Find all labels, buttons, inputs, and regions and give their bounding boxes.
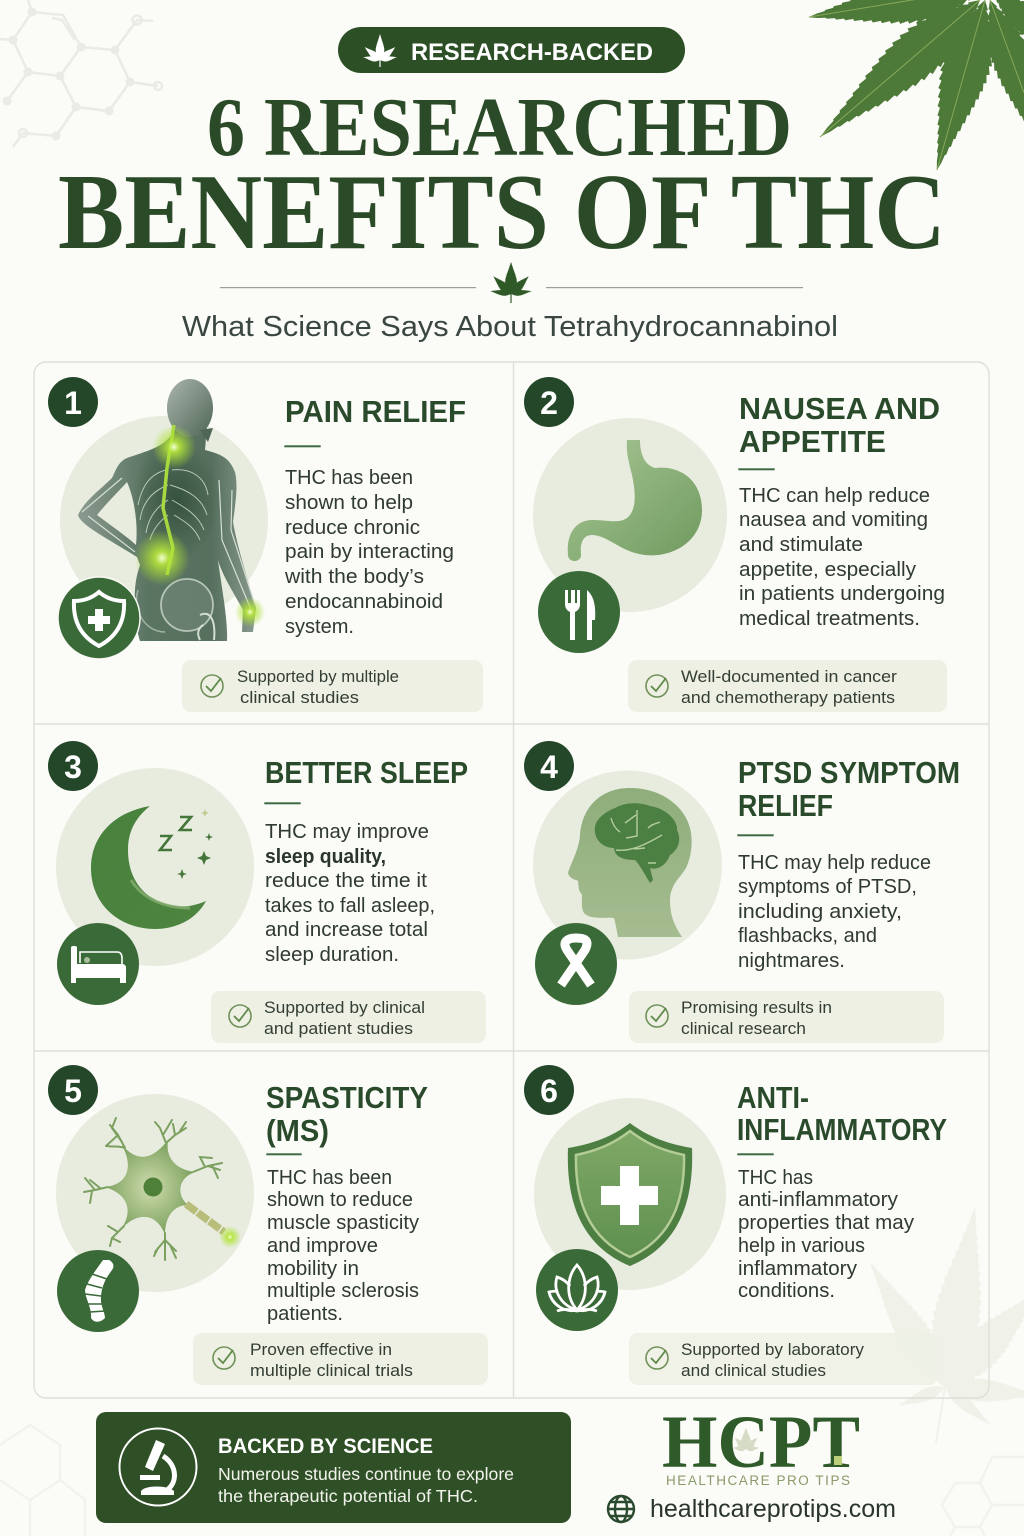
logo: HCPT: HCPT xyxy=(662,1401,860,1484)
body text: in patients undergoing xyxy=(739,583,945,605)
illustration: crescent moon and stars xyxy=(56,768,254,966)
badge: research-backed: RESEARCH-BACKED xyxy=(411,39,653,66)
evidence callout xyxy=(629,991,944,1043)
body text: THC has been xyxy=(267,1167,392,1189)
body text: THC has xyxy=(738,1167,813,1189)
body text: with the body’s xyxy=(284,566,424,588)
badge: research-backed xyxy=(338,27,685,73)
body text: flashbacks, and xyxy=(738,925,877,947)
evidence callout: clinical studies xyxy=(240,689,359,707)
website link with globe: healthcareprotips.com xyxy=(650,1495,896,1523)
icon: ribbon badge xyxy=(535,923,617,1005)
body text xyxy=(739,485,945,630)
molecule decoration xyxy=(0,0,162,147)
body text: sleep duration. xyxy=(265,944,399,966)
evidence callout xyxy=(193,1333,488,1385)
callout: backed by science: BACKED BY SCIENCE xyxy=(218,1435,433,1458)
body text: reduce chronic xyxy=(285,517,420,539)
body text: properties that may xyxy=(738,1212,914,1234)
body text: including anxiety, xyxy=(738,901,902,923)
number 4 xyxy=(524,741,574,791)
icon: spine badge xyxy=(57,1250,139,1332)
panel: pain relief xyxy=(48,377,483,712)
body text: appetite, especially xyxy=(739,559,916,581)
panel: nausea and appetite xyxy=(524,377,947,712)
body text xyxy=(267,1167,419,1325)
body text: mobility in xyxy=(267,1258,359,1280)
heading: BETTER SLEEP xyxy=(265,755,468,790)
title divider with leaf xyxy=(220,262,803,303)
evidence callout: multiple clinical trials xyxy=(250,1362,413,1380)
callout: backed by science: Numerous studies continue to explore xyxy=(218,1464,514,1484)
number 5 xyxy=(48,1065,98,1115)
panel: better sleep xyxy=(48,741,486,1043)
heading xyxy=(266,1080,428,1148)
icon: bed badge xyxy=(57,923,139,1005)
evidence callout: and clinical studies xyxy=(681,1362,826,1380)
logo: HCPT: HEALTHCARE PRO TIPS xyxy=(666,1473,850,1488)
evidence callout: Supported by laboratory xyxy=(681,1341,865,1359)
heading: ANTI- xyxy=(737,1080,809,1115)
number 2 xyxy=(524,377,574,427)
evidence callout xyxy=(182,660,483,712)
body text xyxy=(265,821,435,966)
body text: muscle spasticity xyxy=(267,1212,419,1234)
icon: lotus badge xyxy=(536,1249,618,1331)
body text: shown to reduce xyxy=(267,1189,413,1211)
illustration: head with brain xyxy=(533,770,722,960)
body text: help in various xyxy=(738,1235,865,1257)
heading xyxy=(739,391,940,459)
panel: spasticity xyxy=(48,1065,488,1385)
subtitle: What Science Says About Tetrahydrocannabinol xyxy=(182,311,838,343)
evidence callout: and patient studies xyxy=(264,1020,413,1038)
title xyxy=(58,81,946,272)
evidence callout: Supported by multiple xyxy=(237,668,399,686)
evidence callout xyxy=(629,1333,938,1385)
body text xyxy=(284,467,454,638)
title: BENEFITS OF THC xyxy=(58,153,946,272)
callout: backed by science xyxy=(96,1412,571,1523)
heading: INFLAMMATORY xyxy=(737,1112,947,1147)
number 4: 4 xyxy=(540,749,558,785)
number 1: 1 xyxy=(64,385,82,421)
body text: pain by interacting xyxy=(285,541,454,563)
body text: patients. xyxy=(267,1303,343,1325)
heading: NAUSEA AND xyxy=(739,391,940,426)
benefits grid frame xyxy=(34,362,989,1398)
cannabis leaf top right xyxy=(804,0,1024,177)
icon: leaf xyxy=(362,34,398,67)
callout: backed by science: the therapeutic potential of THC. xyxy=(218,1486,478,1506)
illustration: stomach xyxy=(533,418,727,612)
number 3: 3 xyxy=(64,749,82,785)
body text: THC may help reduce xyxy=(738,852,931,874)
heading: RELIEF xyxy=(738,788,833,823)
panel: ptsd symptom relief xyxy=(524,741,960,1043)
body text: THC can help reduce xyxy=(739,485,930,507)
body text: THC may improve xyxy=(265,821,429,843)
evidence callout: Proven effective in xyxy=(250,1341,392,1359)
evidence callout xyxy=(628,660,947,712)
body text: reduce the time it xyxy=(265,870,427,892)
evidence callout: clinical research xyxy=(681,1020,806,1038)
evidence callout: and chemotherapy patients xyxy=(681,689,895,707)
illustration: human back with glowing spine xyxy=(60,379,268,641)
heading: APPETITE xyxy=(739,424,886,459)
evidence callout: Promising results in xyxy=(681,999,832,1017)
title: 6 RESEARCHED xyxy=(207,81,792,174)
evidence callout: Well-documented in cancer xyxy=(681,668,898,686)
panel: anti-inflammatory xyxy=(524,1065,947,1385)
heading: PTSD SYMPTOM xyxy=(738,755,960,790)
heading xyxy=(737,1080,947,1147)
number 6: 6 xyxy=(540,1073,558,1109)
body text: medical treatments. xyxy=(739,608,920,630)
body text: multiple sclerosis xyxy=(267,1280,419,1302)
body text: endocannabinoid xyxy=(285,591,443,613)
body text: and increase total xyxy=(265,919,428,941)
icon: microscope xyxy=(120,1428,196,1506)
body text: conditions. xyxy=(738,1280,835,1302)
body text xyxy=(738,852,931,972)
hexagon decoration bottom xyxy=(0,1425,1024,1536)
evidence callout xyxy=(211,991,486,1043)
number 3 xyxy=(48,741,98,791)
body text: sleep quality, xyxy=(265,846,386,868)
heading: PAIN RELIEF xyxy=(285,394,466,429)
body text: takes to fall asleep, xyxy=(265,895,435,917)
icon: shield badge xyxy=(58,577,140,659)
body text: and improve xyxy=(267,1235,378,1257)
body text: inflammatory xyxy=(738,1258,857,1280)
body text: system. xyxy=(285,616,354,638)
illustration: shield with cross xyxy=(534,1098,726,1290)
number 2: 2 xyxy=(540,385,558,421)
body text: and stimulate xyxy=(739,534,863,556)
body text: shown to help xyxy=(285,492,413,514)
body text xyxy=(738,1167,914,1302)
heading xyxy=(738,755,960,823)
body text: nausea and vomiting xyxy=(739,509,928,531)
number 1 xyxy=(48,377,98,427)
body text: anti-inflammatory xyxy=(738,1189,898,1211)
body text: nightmares. xyxy=(738,950,845,972)
watermark leaf xyxy=(855,1204,1024,1443)
illustration: neuron xyxy=(56,1094,254,1292)
body text: symptoms of PTSD, xyxy=(738,876,917,898)
icon: fork and knife badge xyxy=(538,571,620,653)
evidence callout: Supported by clinical xyxy=(264,999,425,1017)
heading: (MS) xyxy=(266,1113,329,1148)
heading: SPASTICITY xyxy=(266,1080,428,1115)
number 5: 5 xyxy=(64,1073,82,1109)
number 6 xyxy=(524,1065,574,1115)
body text: THC has been xyxy=(285,467,413,489)
